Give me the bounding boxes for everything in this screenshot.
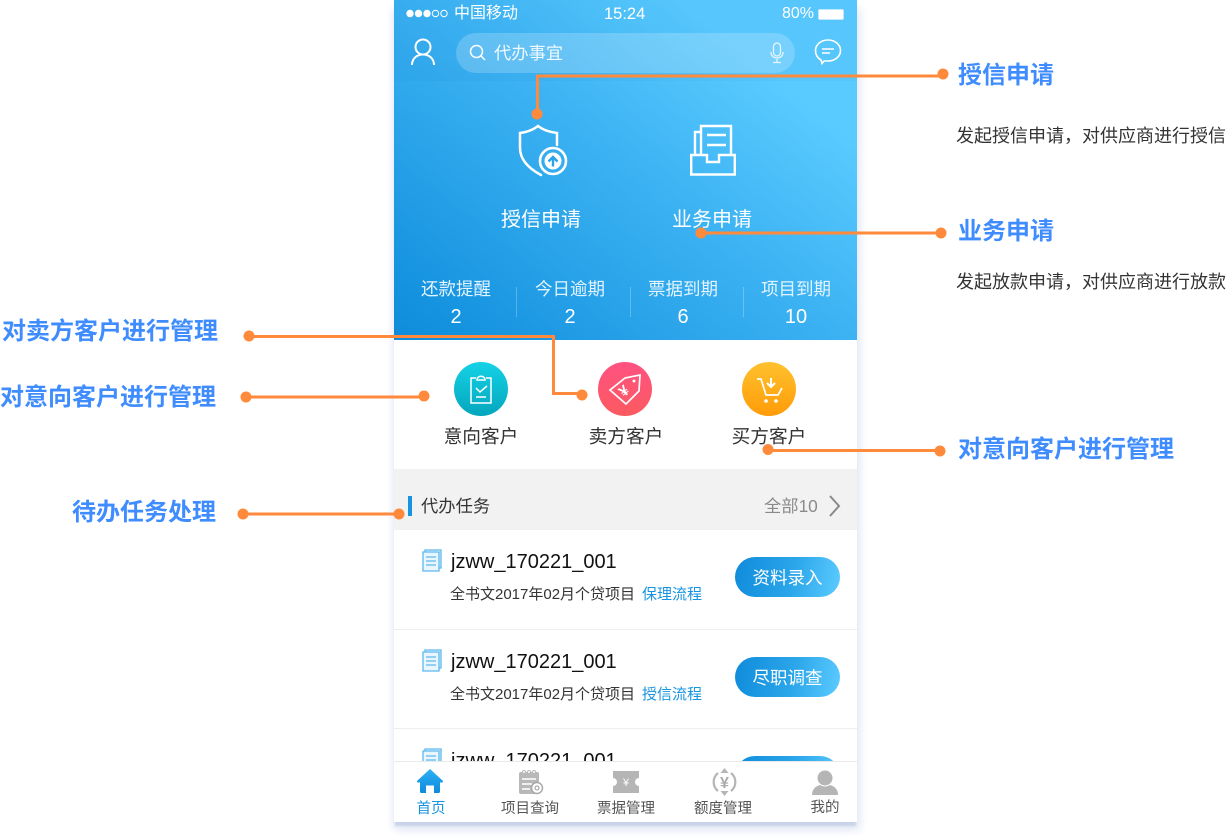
task id: jzww_170221_001 [451, 651, 617, 673]
connector: pending tasks [238, 508, 404, 520]
stat: projects due: 项目到期 [761, 279, 831, 299]
connector: seller customers [244, 330, 588, 400]
icon: documents [422, 649, 442, 672]
search placeholder: 代办事宜 [494, 43, 563, 63]
icon: ticket: ¥ [622, 777, 630, 789]
icon: microphone [770, 42, 784, 64]
tab: project query [501, 770, 559, 817]
tab bar [394, 761, 857, 822]
icon: calendar search [519, 770, 544, 794]
section title: 代办任务 [421, 496, 490, 516]
battery [782, 5, 844, 22]
header panel [394, 0, 857, 340]
stat: projects due: 10 [785, 306, 807, 328]
stat: bills due: 6 [677, 306, 689, 328]
flow link: 保理流程 [642, 586, 702, 603]
tab: me [810, 770, 840, 816]
button: due diligence [735, 657, 840, 697]
connector: credit application [532, 68, 948, 120]
connector: business application [696, 228, 946, 238]
credit limit label: 额度管理 [694, 801, 752, 817]
prospect customers label: 意向客户 [444, 426, 518, 447]
heading: prospect customer management right: 对意向客户进行管理 [958, 436, 1174, 463]
tab: credit limit [694, 768, 752, 817]
connector: prospect customers [240, 390, 430, 402]
bills label: 票据管理 [597, 801, 655, 817]
task id: jzww_170221_001 [451, 551, 617, 573]
battery: 80% [782, 5, 814, 22]
button partial [742, 756, 834, 761]
icon: seller customers [598, 362, 652, 416]
icon: documents [422, 549, 442, 572]
me label: 我的 [810, 800, 840, 816]
icon: home [417, 769, 443, 793]
status bar [406, 4, 844, 23]
search bar [456, 33, 795, 73]
icon: documents [422, 748, 442, 761]
icon: prospect customers [454, 362, 508, 416]
button: due diligence: 尽职调查 [752, 668, 822, 688]
heading: pending tasks: 待办任务处理 [72, 499, 216, 526]
tab: home [416, 769, 446, 817]
stat: bills due: 票据到期 [648, 279, 718, 299]
icon: seller customers: ¥ [616, 382, 633, 401]
stat: repayment reminder [421, 279, 491, 328]
button: data entry [735, 557, 840, 597]
flow link: 授信流程 [642, 686, 702, 703]
clock: 15:24 [604, 5, 645, 23]
stat: bills due [648, 279, 718, 328]
stat: overdue today: 今日逾期 [535, 279, 605, 299]
task row 2 [394, 630, 857, 729]
task section header [394, 469, 857, 530]
icon: chevron [829, 496, 840, 516]
icon: ticket [613, 771, 639, 793]
stat: overdue today [535, 279, 605, 328]
icon: person [812, 770, 838, 795]
top band [394, 0, 857, 81]
stat: repayment reminder: 2 [450, 306, 462, 328]
stat: projects due [761, 279, 831, 328]
icon: inbox documents [690, 124, 736, 176]
accent bar [408, 496, 412, 516]
seller customers label: 卖方客户 [589, 426, 663, 447]
icon: yen cycle: ¥ [720, 775, 729, 792]
credit application label: 授信申请 [501, 209, 581, 231]
icon: yen cycle [712, 768, 736, 796]
heading: seller customer management: 对卖方客户进行管理 [2, 318, 218, 345]
icon: signal dots [406, 10, 448, 18]
home label: 首页 [416, 801, 446, 817]
buyer customers label: 买方客户 [732, 426, 806, 447]
task description: 全书文2017年02月个贷项目 [450, 686, 635, 703]
carrier: 中国移动 [454, 5, 518, 22]
heading: credit application: 授信申请 [958, 62, 1054, 89]
stat: overdue today: 2 [564, 306, 576, 328]
stat: repayment reminder: 还款提醒 [421, 279, 491, 299]
task row 1 [394, 530, 857, 630]
button: data entry: 资料录入 [752, 568, 822, 588]
icon: message [814, 39, 842, 66]
phone screen [394, 0, 857, 822]
business application label: 业务申请 [672, 209, 752, 231]
heading: prospect customer management: 对意向客户进行管理 [0, 384, 216, 411]
icon: buyer customers [742, 362, 796, 416]
tab: bills [597, 771, 655, 817]
connector: buyer customers [762, 444, 946, 456]
view all link: 全部10 [764, 496, 818, 516]
project query label: 项目查询 [501, 801, 559, 817]
task row 3 partial [422, 748, 617, 761]
icon: shield upload [518, 124, 568, 176]
description: credit application: 发起授信申请，对供应商进行授信 [956, 126, 1226, 146]
heading: business application: 业务申请 [958, 218, 1054, 245]
task description: 全书文2017年02月个贷项目 [450, 586, 635, 603]
icon: search [470, 44, 486, 60]
description: business application: 发起放款申请，对供应商进行放款 [956, 272, 1226, 292]
icon: user [411, 38, 435, 65]
